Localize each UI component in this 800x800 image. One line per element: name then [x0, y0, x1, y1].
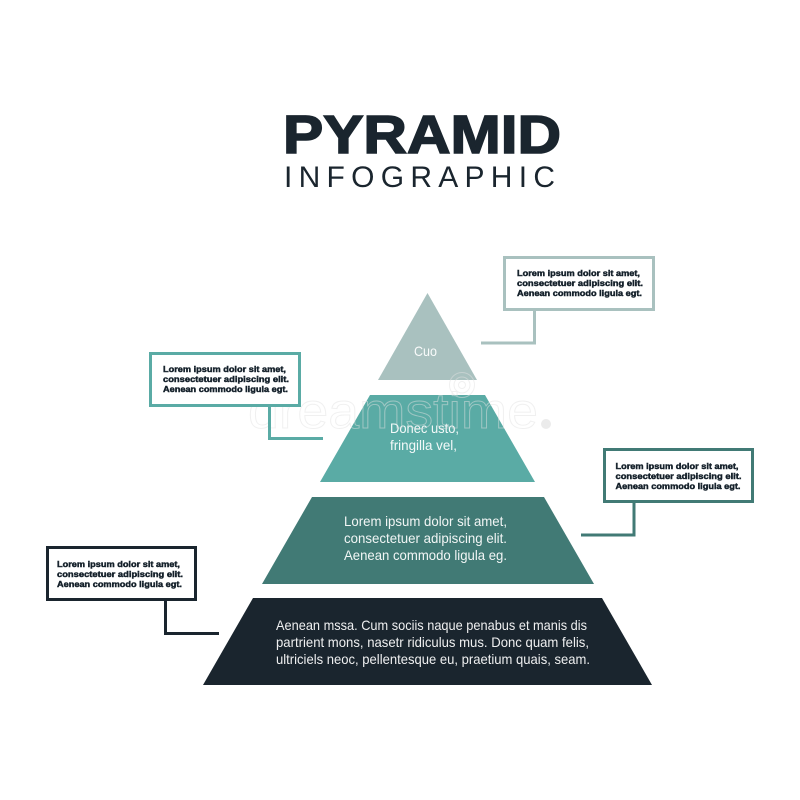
callout: lower left	[48, 548, 219, 634]
callout: lower left: Aenean commodo ligula egt.	[57, 579, 182, 589]
title: PYRAMID	[283, 106, 561, 165]
title: INFOGRAPHIC	[284, 161, 555, 194]
pyramid tier: second: fringilla vel,	[390, 438, 457, 453]
callout: top right	[481, 258, 654, 343]
pyramid tier: top: Cuo	[414, 344, 437, 359]
callout: lower left: consectetuer adipiscing elit.	[57, 569, 183, 579]
callout: middle right	[581, 450, 752, 535]
callout: top right: Lorem ipsum dolor sit amet,	[517, 268, 640, 278]
pyramid tier: third: Lorem ipsum dolor sit amet,	[344, 514, 507, 529]
pyramid tier: second	[320, 395, 535, 482]
callout: upper left: consectetuer adipiscing elit.	[163, 374, 289, 384]
callout: middle right: Aenean commodo ligula egt.	[616, 481, 740, 491]
title	[283, 106, 561, 194]
callout: top right: consectetuer adipiscing elit.	[517, 278, 643, 288]
callout: lower left: Lorem ipsum dolor sit amet,	[57, 559, 180, 569]
callout: top right: Aenean commodo ligula egt.	[517, 288, 642, 298]
pyramid tier: base: partrient mons, nasetr ridiculus mus. Donc quam felis,	[276, 635, 589, 650]
pyramid tier: second: Donec usto,	[390, 421, 459, 436]
pyramid tier: third: Aenean commodo ligula eg.	[344, 548, 507, 563]
callout: upper left: Aenean commodo ligula egt.	[163, 384, 288, 394]
pyramid tier: third: consectetuer adipiscing elit.	[344, 531, 507, 546]
watermark: dreamstime	[248, 383, 538, 439]
pyramid tier: base: ultriciels neoc, pellentesque eu, praetium quais, seam.	[276, 652, 590, 667]
pyramid tier: base: Aenean mssa. Cum sociis naque penabus et manis dis	[276, 618, 587, 633]
pyramid tier: third	[262, 497, 594, 584]
pyramid tier: base	[203, 598, 652, 685]
callout: upper left	[150, 354, 323, 438]
pyramid tier: top	[378, 293, 477, 380]
callout: middle right: Lorem ipsum dolor sit amet,	[616, 461, 738, 471]
callout: middle right: consectetuer adipiscing elit.	[616, 471, 742, 481]
callout: upper left: Lorem ipsum dolor sit amet,	[163, 364, 286, 374]
